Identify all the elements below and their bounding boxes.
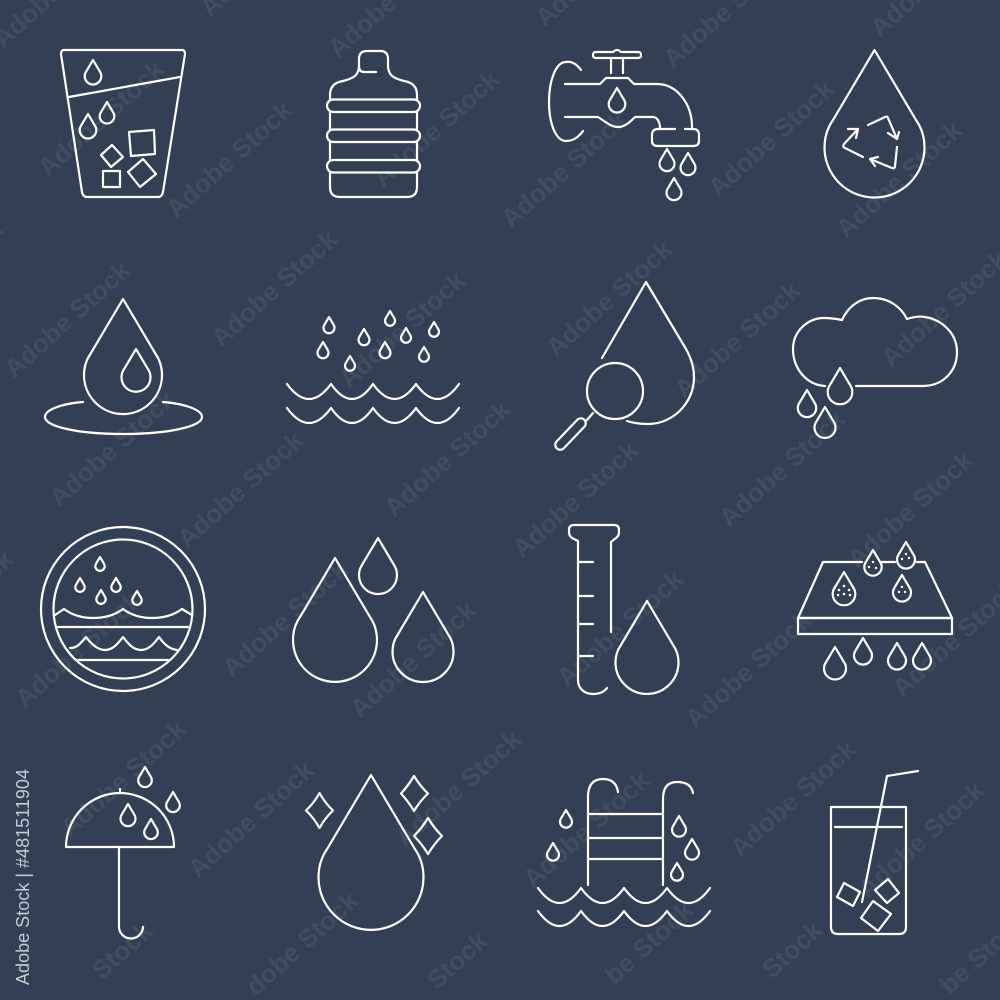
- watermark pattern: Stock: [86, 915, 159, 985]
- watermark pattern: Adobe Stock: [333, 265, 471, 394]
- watermark pattern: Stock: [421, 925, 494, 995]
- watermark pattern: Adobe Stock: [830, 115, 968, 244]
- icon: drink with straw and ice: [831, 771, 918, 934]
- watermark pattern: Adobe Stock: [517, 765, 655, 894]
- icon: rain cloud: [793, 298, 957, 438]
- watermark pattern: Adobe Stock: [679, 605, 817, 734]
- watermark pattern: Adobe Stock: [724, 734, 862, 863]
- watermark pattern: Adobe Stock: [378, 394, 516, 523]
- icon: swimming pool ladder: [538, 779, 710, 926]
- watermark pattern: Adobe Stock: [495, 105, 633, 234]
- watermark pattern: Adobe Stock: [551, 564, 689, 693]
- watermark pattern: Stock: [756, 914, 829, 984]
- watermark pattern: Adobe Stock: [182, 755, 320, 884]
- watermark pattern: Adobe Stock: [216, 554, 354, 683]
- watermark pattern: Adobe Stock: [171, 425, 309, 554]
- watermark pattern: Adobe Stock: [160, 95, 298, 224]
- icon: glass of water with ice: [61, 50, 185, 197]
- watermark pattern: Adobe Stock: [0, 255, 136, 384]
- watermark pattern: Adobe Stock: [43, 384, 181, 513]
- watermark pattern: Adobe Stock: [852, 775, 990, 904]
- watermark pattern: Adobe Stock: [344, 595, 482, 724]
- stock image credit: Adobe Stock | #481511904: [13, 769, 33, 985]
- icon: round water emblem: [41, 527, 205, 691]
- watermark pattern: Adobe Stock: [506, 435, 644, 564]
- icon: water filter: [798, 542, 952, 679]
- watermark pattern: dobe Stock: [240, 885, 364, 1000]
- icon: recycled water drop: [824, 50, 924, 198]
- icon: water cooler bottle: [327, 51, 420, 197]
- icon: rain over waves: [287, 311, 459, 423]
- icon: three water drops: [293, 538, 454, 682]
- icon: drop under magnifying glass: [555, 282, 694, 450]
- watermark pattern: Adobe Stock: [9, 585, 147, 714]
- watermark pattern: Adobe Stock: [702, 74, 840, 203]
- icon: drop in puddle: [45, 299, 202, 434]
- watermark pattern: Adobe Stock: [54, 714, 192, 843]
- icon: test tube and drop: [569, 525, 678, 694]
- icon: sparkling clean drop: [306, 775, 442, 930]
- watermark pattern: Adobe Stock: [389, 724, 527, 853]
- watermark pattern: Adobe Stock: [205, 224, 343, 353]
- watermark pattern: Adobe Stock: [713, 404, 851, 533]
- watermark pattern: be Stock: [598, 895, 699, 990]
- watermark pattern: Adobe Stock: [367, 64, 505, 193]
- watermark pattern: Adobe Stock: [841, 445, 979, 574]
- watermark pattern: Adobe Stock: [668, 275, 806, 404]
- icon: umbrella in rain: [66, 767, 180, 939]
- watermark pattern: Adobe Stock: [32, 54, 170, 183]
- watermark pattern: Adobe Stock: [540, 234, 678, 363]
- icon: dripping tap: [549, 50, 699, 200]
